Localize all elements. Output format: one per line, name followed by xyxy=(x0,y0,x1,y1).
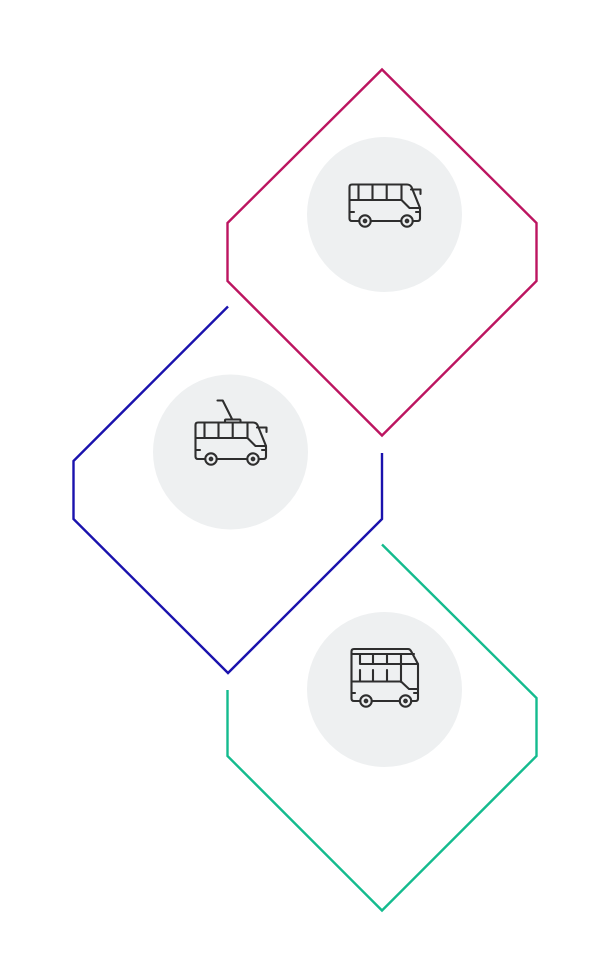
hexagon outline: green xyxy=(228,544,536,910)
panel: magenta hexagon xyxy=(228,70,536,436)
icon circle: magenta panel xyxy=(307,137,462,292)
panel: green hexagon xyxy=(228,544,536,910)
hexagon outline: magenta xyxy=(228,70,536,436)
hexagon outline: blue xyxy=(74,306,382,673)
icon: double-decker bus xyxy=(352,649,418,707)
panel: blue hexagon xyxy=(74,306,382,673)
icon circle: green panel xyxy=(307,612,462,767)
icon circle: blue panel xyxy=(153,374,308,530)
icon: trolleybus xyxy=(196,400,266,465)
icon: coach bus xyxy=(350,184,420,227)
